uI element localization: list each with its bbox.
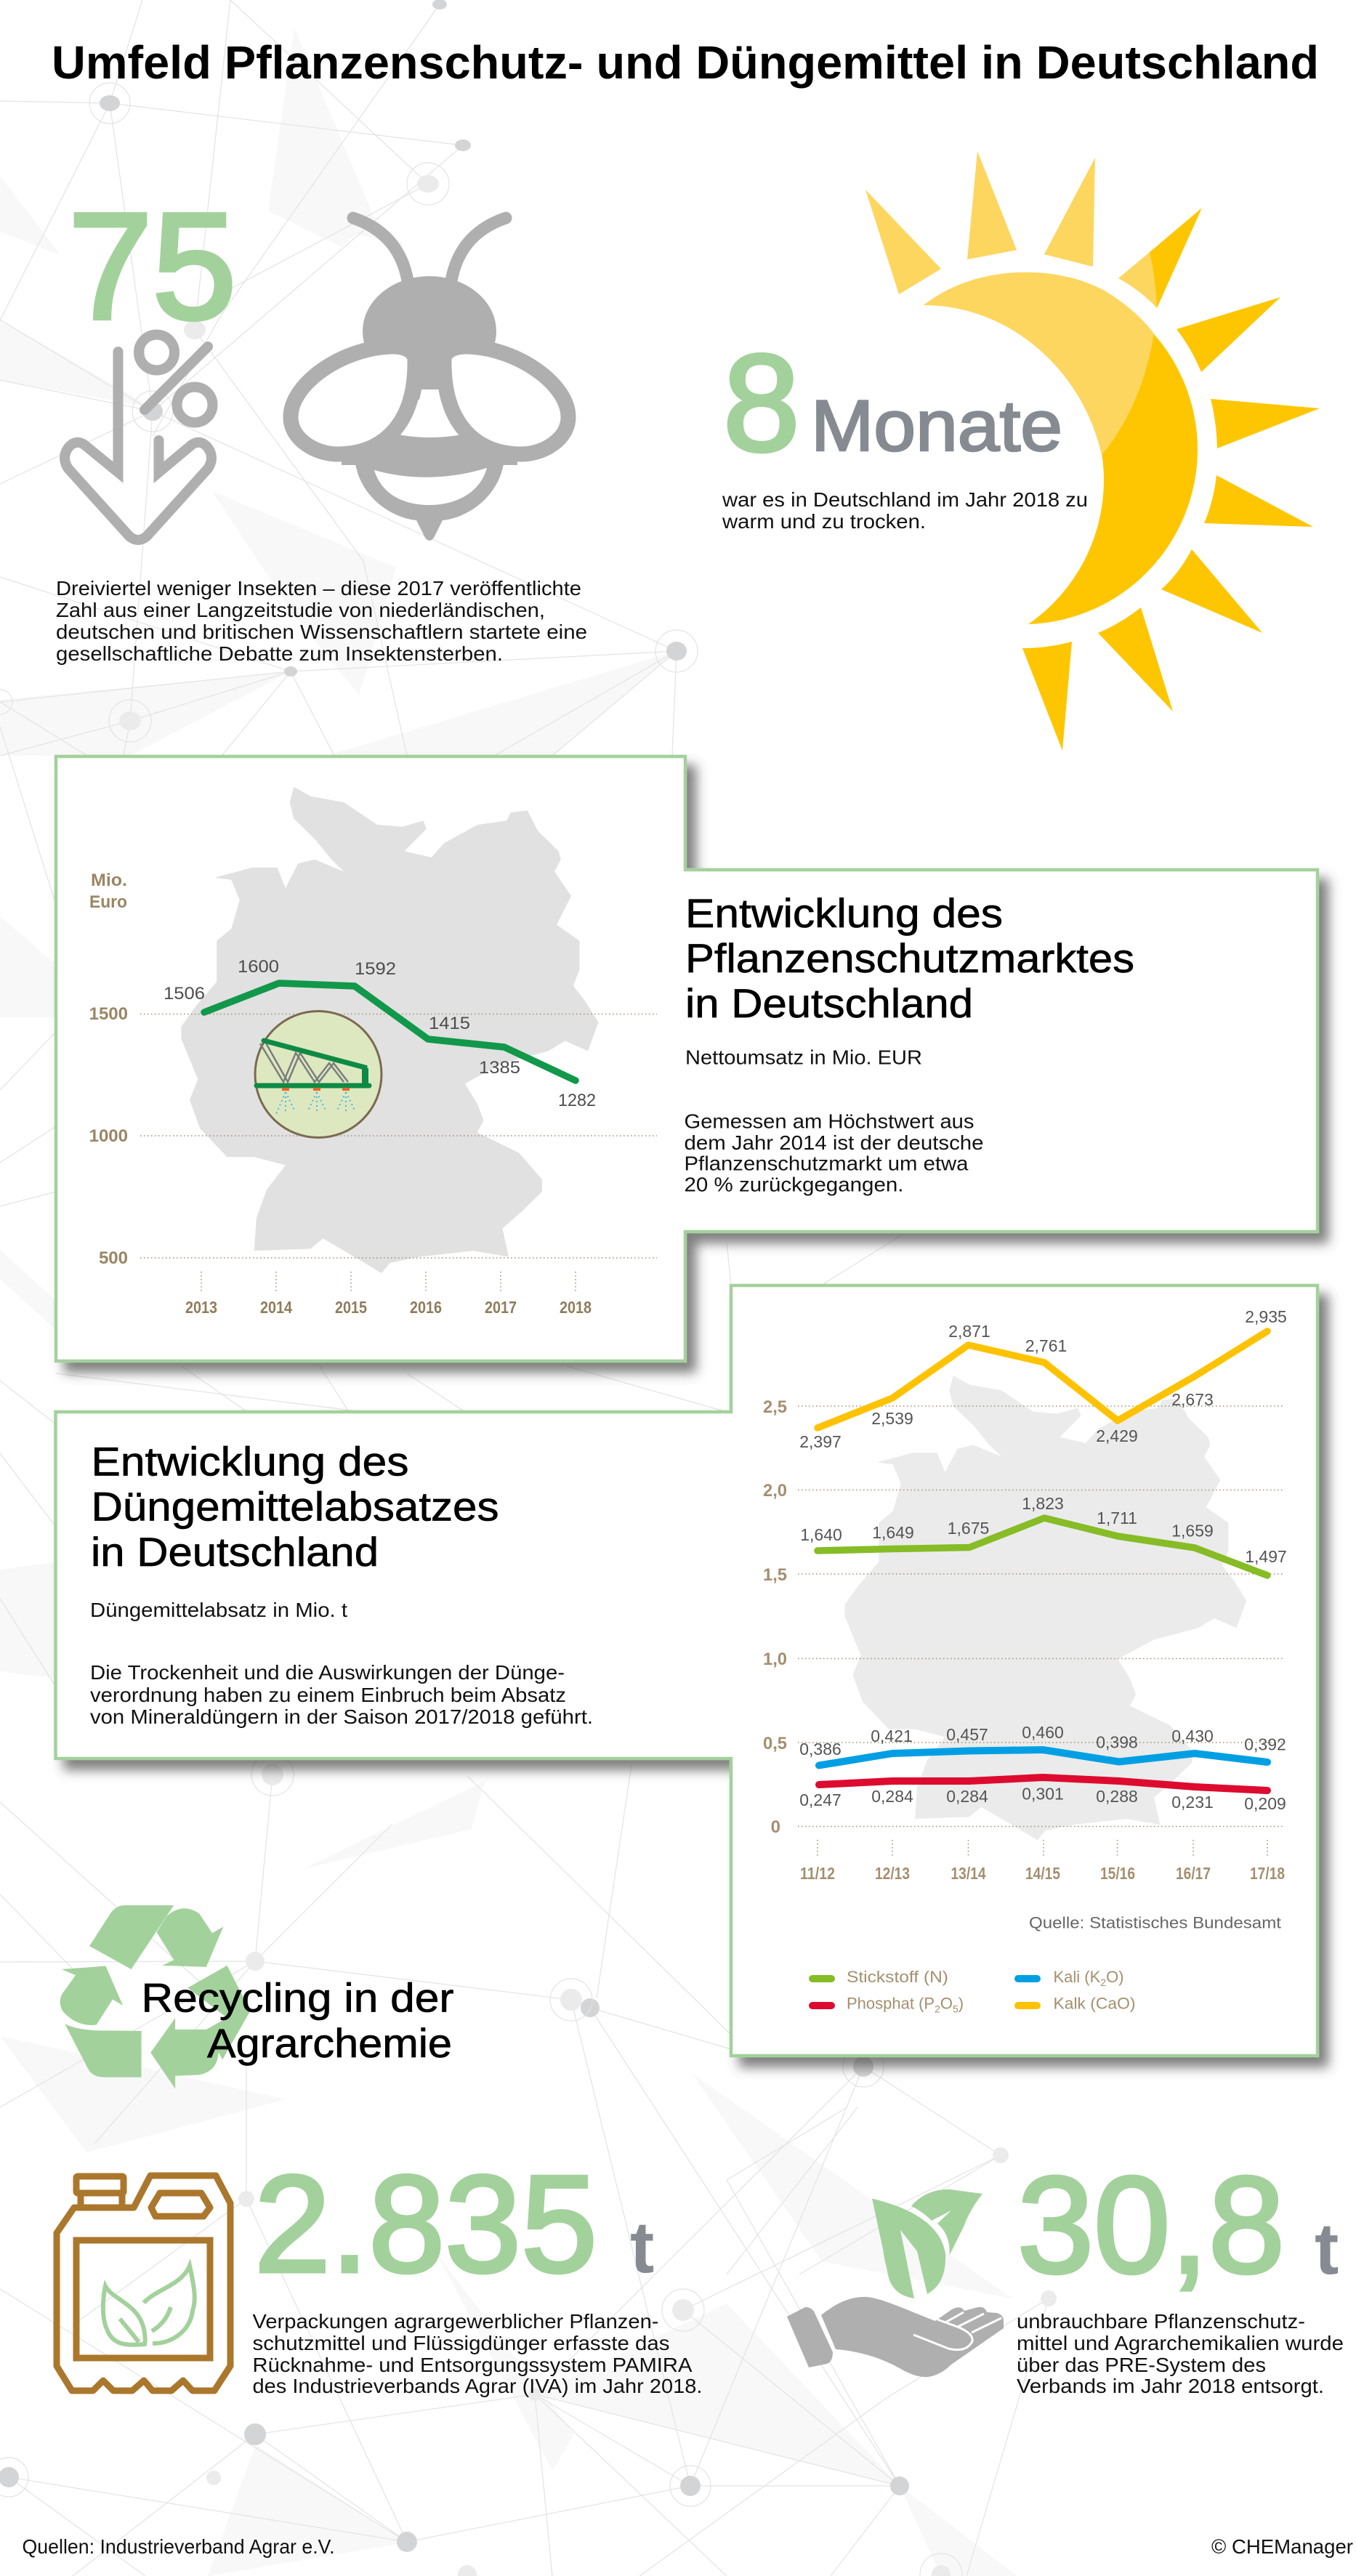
legend: Phosphat (P [847, 1994, 935, 2013]
heading: Düngemittelabsatz: Düngemittelabsatzes [92, 1484, 499, 1529]
chart: Düngemittelabsatz: 11/12 [800, 1864, 835, 1883]
body text: verordnung haben zu einem Einbruch beim Absatz [90, 1684, 566, 1706]
text: insects: gesellschaftliche Debatte zum Insektensterben. [56, 642, 503, 665]
panel: Düngemittelabsatz [55, 1285, 1317, 2056]
values: 1,675 [948, 1519, 989, 1538]
chart: Düngemittelabsatz: 14/15 [1025, 1864, 1060, 1883]
chart: Nettoumsatz: 2015 [335, 1298, 367, 1317]
chart: Nettoumsatz: Euro [89, 892, 127, 912]
text: insects: Dreiviertel weniger Insekten – diese 2017 veröffentlichte [56, 577, 581, 599]
text: PRE-System [1017, 2310, 1344, 2397]
body text: von Mineraldüngern in der Saison 2017/2018 geführt. [90, 1705, 593, 1728]
chart: Nettoumsatz: 2016 [410, 1298, 442, 1317]
values: 0,284 [946, 1787, 988, 1806]
chart: Nettoumsatz: 500 [99, 1248, 128, 1268]
text: warm: war es in Deutschland im Jahr 2018 zu [722, 488, 1088, 511]
heading: Pflanzenschutzmarkt: Entwicklung des [685, 890, 1003, 936]
heading: Recycling: Agrarchemie [207, 2020, 452, 2066]
values: 1,497 [1245, 1547, 1287, 1566]
body text [685, 1110, 984, 1196]
stat: 30,8 t: 30,8 [1017, 2149, 1285, 2302]
stat: 2.835 t: t [630, 2207, 654, 2288]
subtitle: Düngemittelabsatz in Mio. t [90, 1599, 347, 1621]
chart: Düngemittelabsatz: 0,5 [763, 1734, 787, 1753]
heading: Düngemittelabsatz: Entwicklung des [92, 1439, 408, 1484]
chart: Düngemittelabsatz: 1,0 [763, 1650, 787, 1669]
legend: Kalk (CaO) [1054, 1994, 1135, 2013]
title: Umfeld Pflanzenschutz- und Düngemittel in Deutschland [52, 36, 1319, 89]
chart: Düngemittelabsatz: 2,0 [763, 1481, 787, 1501]
chart: Düngemittelabsatz [763, 1307, 1287, 2014]
line: Kali [819, 1750, 1267, 1766]
text: insects: deutschen und britischen Wissenschaftlern startete eine [56, 621, 587, 643]
chart: Düngemittelabsatz: 1,5 [763, 1565, 787, 1585]
values: 0,231 [1171, 1793, 1214, 1812]
chart: Nettoumsatz: Mio. [91, 871, 127, 890]
big number 75: 75 [68, 182, 236, 351]
legend: Stickstoff (N) [847, 1968, 948, 1986]
body text: 20 % zurückgegangen. [685, 1173, 904, 1196]
legend: O [940, 1994, 953, 2013]
stat: 2.835 t: 2.835 [254, 2147, 597, 2301]
stat: 8 Monate [722, 326, 1088, 533]
subtitle: Nettoumsatz in Mio. EUR [685, 1046, 922, 1068]
values: 0,398 [1096, 1732, 1138, 1751]
values: 0,301 [1022, 1785, 1064, 1804]
source: Quelle: Statistisches Bundesamt [1029, 1914, 1281, 1931]
stat: 75 percent down [65, 182, 236, 540]
heading: Pflanzenschutzmarkt [685, 890, 1134, 1026]
values: 0,247 [799, 1790, 842, 1809]
text: PAMIRA [253, 2310, 702, 2397]
background: network pattern [0, 0, 1057, 2576]
legend: 2 [1100, 1977, 1106, 1988]
text: PAMIRA: des Industrieverbands Agrar (IVA) im Jahr 2018. [253, 2375, 702, 2397]
values [799, 1307, 1287, 1813]
chart: Nettoumsatz: 1385 [479, 1058, 520, 1078]
chart: Düngemittelabsatz: 12/13 [875, 1864, 910, 1883]
legend: 2 [935, 2003, 940, 2014]
chart: Nettoumsatz: 1592 [355, 959, 396, 979]
icon: percent down arrow [65, 334, 212, 540]
text: PAMIRA: Verpackungen agrargewerblicher Pflanzen- [253, 2310, 658, 2333]
values: 0,386 [799, 1740, 842, 1759]
chart: Nettoumsatz: 1500 [89, 1004, 128, 1024]
body text: dem Jahr 2014 ist der deutsche [685, 1131, 984, 1154]
chart: Düngemittelabsatz: 0 [771, 1817, 780, 1837]
text: PRE-System: über das PRE-System des [1017, 2354, 1266, 2376]
text: insects [56, 577, 587, 665]
values: 2,761 [1025, 1336, 1067, 1355]
heading: Düngemittelabsatz [91, 1439, 499, 1575]
chart: Düngemittelabsatz: 2,5 [763, 1397, 787, 1417]
chart: Düngemittelabsatz: 13/14 [951, 1864, 986, 1883]
line: Phosphat [819, 1777, 1267, 1790]
chart: Düngemittelabsatz: 15/16 [1100, 1864, 1135, 1883]
values: 2,429 [1096, 1426, 1138, 1445]
values: 0,284 [871, 1787, 913, 1806]
heading: Pflanzenschutzmarkt: in Deutschland [685, 980, 973, 1026]
values: 1,640 [800, 1525, 842, 1544]
map of Germany [844, 1376, 1246, 1840]
values: 0,460 [1022, 1723, 1064, 1742]
values: 0,421 [871, 1727, 913, 1745]
copyright: © CHEManager [1211, 2535, 1353, 2558]
legend: 5 [953, 2003, 959, 2014]
values: 2,397 [799, 1432, 842, 1451]
icon: bee [291, 218, 568, 541]
icon: hand with leaves [787, 2189, 1004, 2377]
body text: Gemessen am Höchstwert aus [685, 1110, 974, 1132]
values: 0,288 [1096, 1787, 1138, 1806]
body text: Pflanzenschutzmarkt um etwa [685, 1152, 969, 1174]
values: 0,457 [946, 1725, 988, 1744]
legend: O) [1106, 1968, 1124, 1986]
chart: Nettoumsatz: 2018 [560, 1298, 592, 1317]
chart: Düngemittelabsatz: 17/18 [1250, 1864, 1285, 1883]
line: Stickstoff [818, 1518, 1267, 1575]
values: 2,935 [1245, 1307, 1287, 1326]
values: 2,539 [871, 1409, 913, 1428]
text: insects: Zahl aus einer Langzeitstudie von niederländischen, [56, 599, 545, 621]
values: 0,392 [1244, 1735, 1286, 1754]
legend [809, 1968, 1135, 2014]
text: PRE-System: mittel und Agrarchemikalien wurde [1017, 2332, 1344, 2354]
values: 2,871 [948, 1322, 990, 1341]
legend: ) [959, 1994, 964, 2013]
chart: Nettoumsatz: 1506 [164, 984, 205, 1004]
text: PAMIRA: Rücknahme- und Entsorgungssystem PAMIRA [253, 2354, 693, 2376]
icon: field sprayer [255, 1012, 382, 1138]
chart: Nettoumsatz: 2013 [185, 1298, 217, 1317]
icon: canister [57, 2176, 230, 2391]
chart: Düngemittelabsatz: 16/17 [1176, 1864, 1211, 1883]
body text [90, 1661, 593, 1728]
map of Germany [181, 787, 598, 1273]
chart: Nettoumsatz: 2014 [260, 1298, 292, 1317]
heading: Recycling: Recycling in der [141, 1975, 453, 2020]
heading: Pflanzenschutzmarkt: Pflanzenschutzmarktes [685, 935, 1134, 981]
chart: Nettoumsatz: 1282 [558, 1091, 596, 1110]
values: 1,659 [1171, 1522, 1214, 1541]
text: PAMIRA: schutzmittel und Flüssigdünger erfasste das [253, 2332, 670, 2354]
text: PRE-System: unbrauchbare Pflanzenschutz- [1017, 2310, 1305, 2333]
heading: Düngemittelabsatz: in Deutschland [91, 1529, 379, 1575]
chart: Nettoumsatz: 1415 [429, 1014, 470, 1033]
chart: Nettoumsatz: 1600 [238, 957, 279, 977]
big number 8: 8 [723, 326, 800, 480]
stat: 30,8 t: t [1315, 2208, 1339, 2290]
values: 1,823 [1022, 1494, 1064, 1513]
values: 2,673 [1171, 1390, 1214, 1409]
icon: recycling [60, 1905, 250, 2089]
text: PRE-System: Verbands im Jahr 2018 entsorgt. [1017, 2375, 1324, 2397]
values: 0,209 [1244, 1794, 1286, 1813]
chart: Nettoumsatz [89, 871, 657, 1317]
values: 0,430 [1171, 1727, 1214, 1745]
body text: Die Trockenheit und die Auswirkungen der Dünge- [90, 1661, 565, 1684]
heading: Recycling [141, 1975, 453, 2066]
icon: sun [865, 151, 1320, 751]
chart: Nettoumsatz: 2017 [485, 1298, 517, 1317]
values: 1,649 [872, 1523, 914, 1542]
legend: Kali (K [1054, 1968, 1100, 1986]
stat: 8 Monate: warm und zu trocken. [722, 510, 926, 533]
panel: Pflanzenschutzmarkt [56, 756, 1317, 1361]
line: Kalk [818, 1331, 1267, 1428]
source line: Quellen: Industrieverband Agrar e.V. [22, 2535, 334, 2558]
word Monate: Monate [811, 385, 1062, 466]
chart: Nettoumsatz: 1000 [89, 1126, 128, 1146]
values: 1,711 [1097, 1509, 1137, 1527]
